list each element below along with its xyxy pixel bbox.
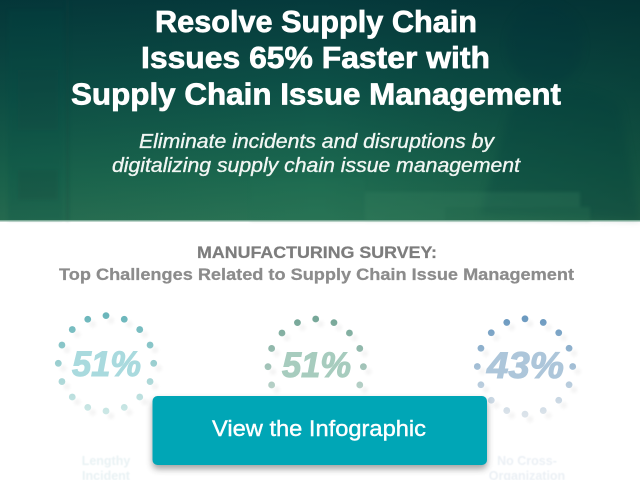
stat: 51% lengthy incident — [55, 312, 162, 480]
title: Supply Chain Issue Management — [71, 76, 561, 112]
survey heading: Top Challenges Related to Supply Chain Issue Management — [59, 265, 574, 284]
label: No Cross- — [497, 454, 557, 468]
label — [82, 454, 131, 480]
value 51%: 51% — [282, 346, 351, 385]
survey heading: MANUFACTURING SURVEY: — [197, 243, 437, 262]
label: Lengthy — [82, 454, 130, 468]
dotted ring 2 — [265, 316, 372, 423]
hero photo: worker silhouette on the right — [480, 3, 640, 220]
value 51%: 51% — [72, 345, 141, 384]
title — [71, 4, 561, 112]
button — [152, 396, 487, 469]
title: Resolve Supply Chain — [155, 4, 477, 39]
value 43%: 43% — [486, 345, 564, 386]
survey heading — [59, 243, 574, 284]
dotted ring 3 — [474, 315, 581, 423]
label — [489, 454, 565, 480]
hero photo: boxes at lower right — [250, 178, 590, 221]
dotted ring 1 — [55, 312, 162, 419]
button: View the Infographic — [212, 416, 426, 441]
subtitle: Eliminate incidents and disruptions by — [139, 131, 495, 153]
stat: 51% middle — [265, 316, 372, 423]
title: Issues 65% Faster with — [141, 40, 490, 75]
hero photo: shelving on the left — [8, 0, 69, 221]
subtitle — [112, 131, 522, 177]
hero banner — [0, 0, 640, 222]
subtitle: digitalizing supply chain issue management — [112, 155, 522, 177]
stat: 43% no cross-organization — [474, 315, 581, 480]
